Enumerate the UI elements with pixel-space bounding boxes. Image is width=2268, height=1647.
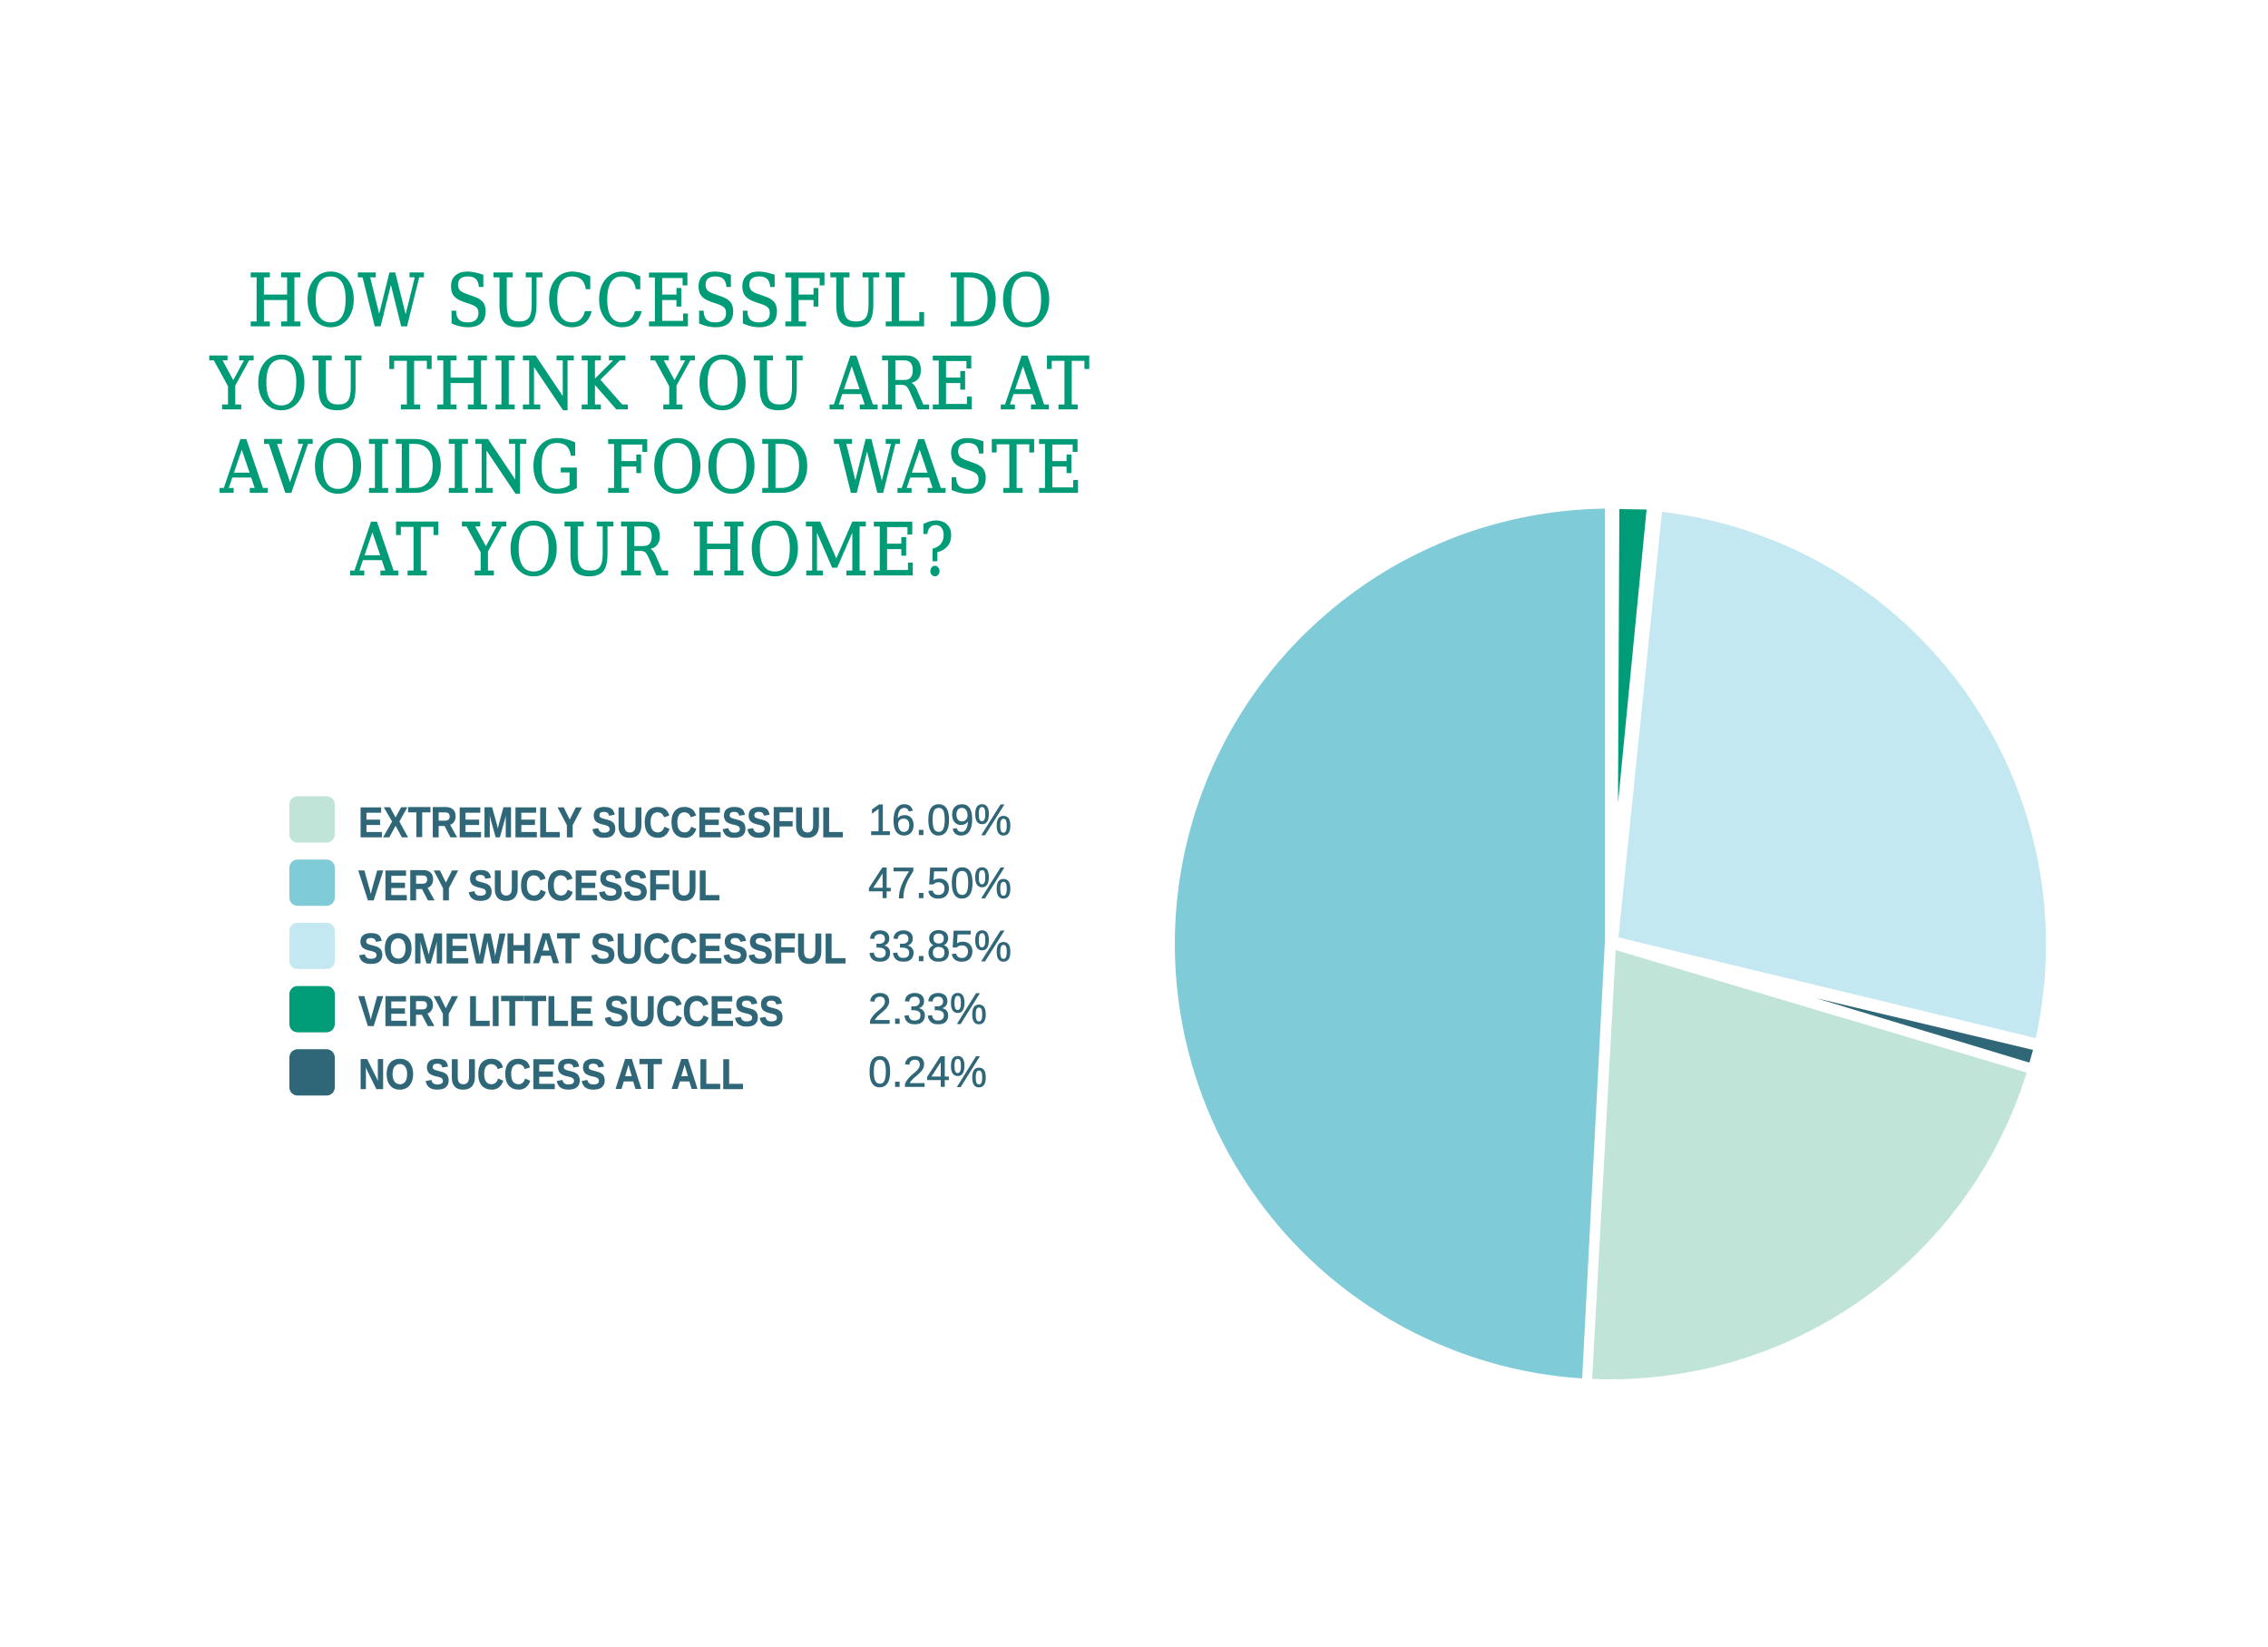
slice: very little success [1618, 509, 1647, 803]
legend row: no success at all: 0.24% [868, 1049, 987, 1097]
title [210, 259, 1090, 593]
slice: somewhat successful [1618, 512, 2046, 1038]
legend row: very successful: VERY SUCCESSFUL [358, 861, 720, 909]
title: AVOIDING FOOD WASTE [220, 425, 1082, 510]
pie chart [1175, 508, 2046, 1379]
legend row: very little success [289, 985, 987, 1035]
title: HOW SUCCESSFUL DO [248, 259, 1052, 343]
slice: extremely successful [1592, 950, 2027, 1379]
legend row: very little success: 2.33% [868, 985, 987, 1034]
legend row: very successful: 47.50% [868, 859, 1012, 907]
slice: no success at all [1816, 998, 2033, 1063]
legend row: very little success: VERY LITTLE SUCCESS [358, 987, 784, 1035]
legend row: very successful [289, 859, 1012, 909]
legend row: no success at all: NO SUCCESS AT ALL [358, 1050, 744, 1098]
legend row: no success at all [289, 1049, 987, 1098]
title: AT YOUR HOME? [350, 507, 953, 593]
slice: very successful [1175, 508, 1605, 1378]
legend row: somewhat successful: SOMEWHAT SUCCESSFUL [358, 924, 846, 972]
legend row: somewhat successful: 33.85% [868, 923, 1012, 971]
title: YOU THINK YOU ARE AT [210, 341, 1090, 426]
legend row: extremely successful: 16.09% [868, 797, 1012, 845]
legend [289, 797, 1012, 1098]
legend row: extremely successful: EXTREMELY SUCCESSFUL [358, 799, 844, 846]
